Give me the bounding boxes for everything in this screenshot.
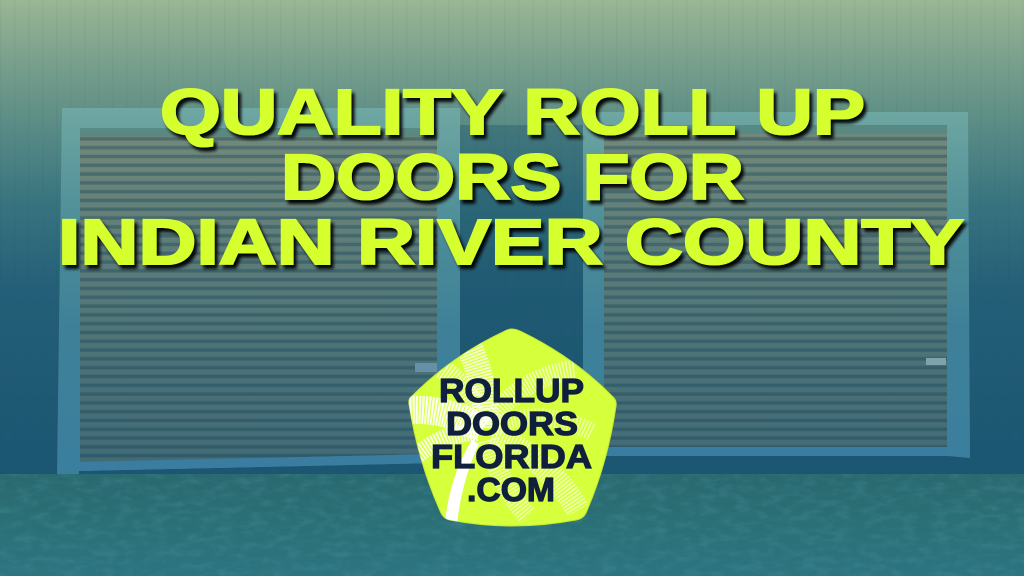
logo text: FLORIDA bbox=[431, 438, 592, 475]
title: quality roll up doors for indian river county bbox=[58, 76, 964, 278]
center wall between doors bbox=[460, 125, 583, 465]
logo text bbox=[431, 372, 592, 508]
title: quality roll up doors for indian river county: DOORS FOR bbox=[281, 141, 744, 213]
logo text: .COM bbox=[467, 471, 555, 508]
title: quality roll up doors for indian river county: QUALITY ROLL UP bbox=[160, 76, 865, 148]
icon: palm tree silhouette bbox=[408, 348, 592, 524]
badge pentagon shape bbox=[409, 329, 616, 526]
logo text: DOORS bbox=[446, 405, 578, 442]
grass foreground bbox=[0, 474, 1024, 576]
logo badge bbox=[408, 329, 616, 526]
left roll up door bbox=[57, 108, 460, 474]
logo text: ROLLUP bbox=[439, 372, 584, 409]
right roll up door bbox=[583, 112, 970, 458]
title: quality roll up doors for indian river county: INDIAN RIVER COUNTY bbox=[58, 206, 964, 278]
